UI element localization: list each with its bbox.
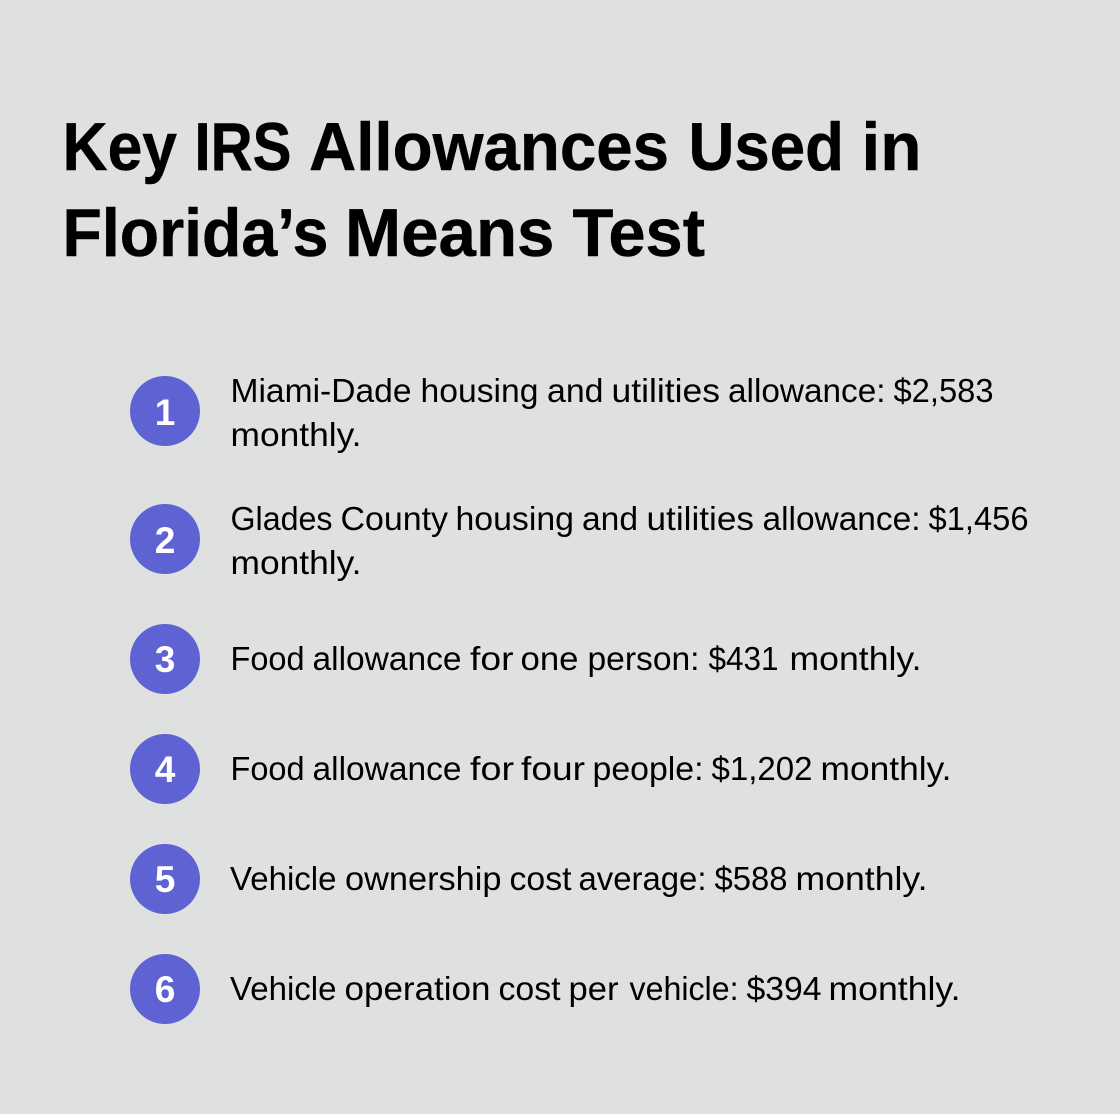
item 4 text: monthly. bbox=[820, 750, 952, 787]
item 2 text: Glades bbox=[230, 500, 332, 537]
item 2 text: allowance: bbox=[762, 500, 920, 537]
item 2 text: housing bbox=[456, 500, 574, 537]
number badge 1 bbox=[130, 376, 200, 446]
item 6 text: per bbox=[568, 970, 619, 1007]
item 2 text: monthly. bbox=[230, 544, 362, 581]
item 5 text: cost bbox=[510, 860, 572, 897]
title: Allowances bbox=[309, 109, 669, 185]
title: in bbox=[862, 109, 922, 185]
item 6 text: vehicle: bbox=[630, 970, 738, 1007]
number badge 6 bbox=[130, 954, 200, 1024]
item 4 text: people: bbox=[592, 750, 704, 787]
number badge 5: 5 bbox=[155, 859, 175, 900]
title: Florida’s bbox=[62, 195, 328, 271]
number badge 3: 3 bbox=[155, 639, 175, 680]
item 6 text: $394 bbox=[746, 970, 822, 1007]
item 2 text: County bbox=[340, 500, 449, 537]
list item 1: Miami-Dade housing bbox=[130, 372, 994, 453]
item 6 text: cost bbox=[498, 970, 560, 1007]
item 1 text: utilities bbox=[612, 372, 720, 409]
number badge 5 bbox=[130, 844, 200, 914]
title: Test bbox=[572, 195, 705, 271]
title: Means bbox=[345, 195, 554, 271]
item 1 text: allowance: bbox=[728, 372, 886, 409]
item 1 text: and bbox=[547, 372, 604, 409]
item 4 text: allowance bbox=[312, 750, 462, 787]
item 4 text: four bbox=[521, 750, 585, 787]
item 1 text: monthly. bbox=[230, 416, 362, 453]
item 5 text: Vehicle bbox=[230, 860, 336, 897]
title bbox=[62, 109, 922, 271]
item 5 text: $588 bbox=[714, 860, 788, 897]
number badge 1: 1 bbox=[155, 392, 175, 433]
list item 6: vehicle operation bbox=[130, 954, 960, 1024]
title: Key bbox=[62, 109, 177, 185]
item 4 text: Food bbox=[230, 750, 304, 787]
number badge 4 bbox=[130, 734, 200, 804]
item 1 text: $2,583 bbox=[894, 372, 994, 409]
number badge 3 bbox=[130, 624, 200, 694]
item 6 text: operation bbox=[344, 970, 490, 1007]
item 2 text: and bbox=[582, 500, 638, 537]
number badge 2 bbox=[130, 504, 200, 574]
item 6 text: monthly. bbox=[828, 970, 960, 1007]
item 1 text bbox=[230, 372, 994, 453]
item 4 text: for bbox=[470, 750, 514, 787]
item 6 text: Vehicle bbox=[230, 970, 336, 1007]
list item 4: food for four bbox=[130, 734, 952, 804]
title: IRS bbox=[194, 109, 292, 185]
item 2 text: $1,456 bbox=[928, 500, 1028, 537]
item 4 text: $1,202 bbox=[712, 750, 812, 787]
item 1 text: housing bbox=[420, 372, 538, 409]
item 3 text: one bbox=[520, 640, 578, 677]
item 3 text: Food bbox=[230, 640, 304, 677]
item 5 text: average: bbox=[578, 860, 706, 897]
number badge 6: 6 bbox=[155, 969, 175, 1010]
number badge 2: 2 bbox=[155, 520, 175, 561]
item 5 text: monthly. bbox=[796, 860, 928, 897]
item 2 text bbox=[230, 500, 1028, 581]
item 3 text: person: bbox=[588, 640, 700, 677]
item 1 text: Miami-Dade bbox=[230, 372, 412, 409]
item 3 text: for bbox=[470, 640, 514, 677]
item 3 text: $431 bbox=[708, 640, 778, 677]
list item 5: vehicle ownership bbox=[130, 844, 928, 914]
item 3 text: monthly. bbox=[790, 640, 922, 677]
list item 2: Glades County housing bbox=[130, 500, 1028, 581]
title: Used bbox=[688, 109, 844, 185]
item 2 text: utilities bbox=[646, 500, 754, 537]
list item 3: food for one bbox=[130, 624, 922, 694]
number badge 4: 4 bbox=[155, 749, 176, 790]
item 3 text: allowance bbox=[312, 640, 462, 677]
item 5 text: ownership bbox=[345, 860, 502, 897]
